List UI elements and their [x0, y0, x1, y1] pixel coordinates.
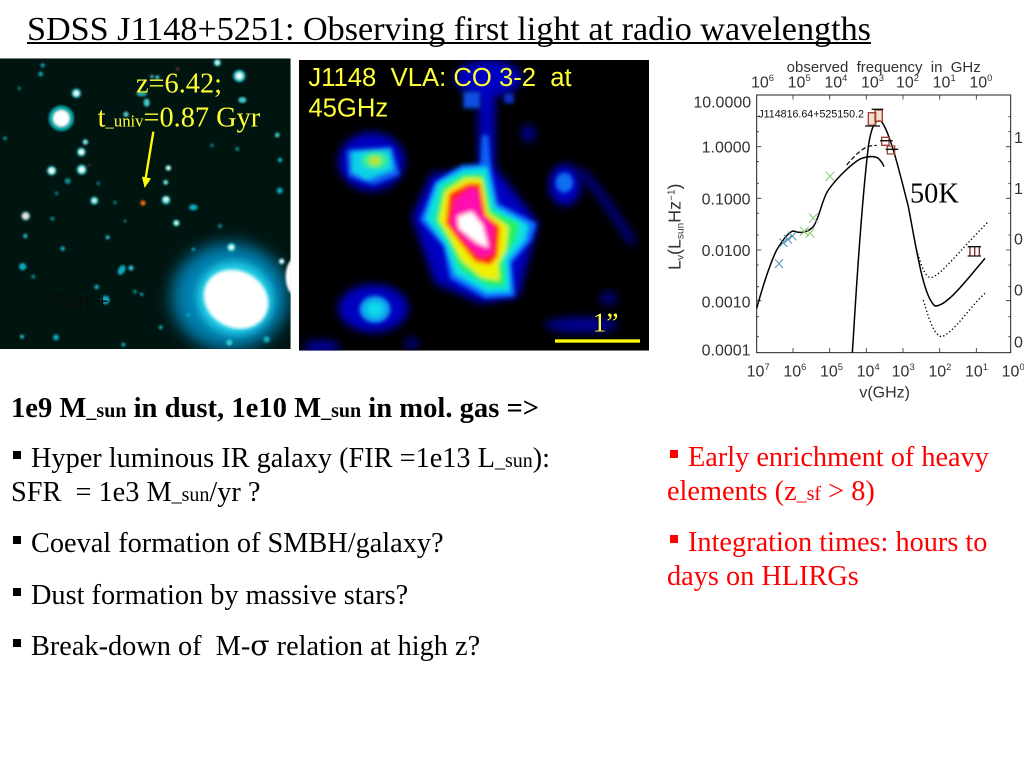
label: redshift: t_univ=0.87 Gyr	[98, 102, 261, 133]
x-axis labels: 10	[1002, 364, 1019, 381]
y-axis labels: 10.0000	[693, 94, 751, 111]
right-axis labels: 0	[1014, 232, 1023, 249]
red bullet: early enrichment: Early enrichment of heavy	[688, 442, 990, 473]
x-axis labels: 10	[820, 364, 838, 381]
top axis label: observed frequency in GHz	[787, 59, 981, 76]
bullet: break-down: Break-down of M-σ relation at high z?	[31, 629, 480, 662]
y-axis labels: 0.1000	[702, 192, 751, 209]
x-axis labels: 10	[857, 364, 874, 381]
red bullet: integration times: Integration times: hours to	[688, 527, 987, 558]
source name: J114816.64+525150.2	[758, 108, 864, 120]
x-axis labels: 3	[909, 362, 915, 372]
top axis ticks: 10	[824, 75, 842, 92]
scale bar	[555, 308, 640, 343]
top axis ticks	[751, 73, 992, 92]
y-axis labels: 1.0000	[702, 140, 751, 157]
red bullet: integration times	[667, 527, 987, 592]
x-axis labels: 2	[946, 362, 951, 372]
red bullet: early enrichment: elements (z_sf > 8)	[667, 476, 875, 507]
bright stars	[3, 59, 284, 347]
x-axis labels: 10	[747, 364, 764, 381]
right-axis labels: 0	[1014, 334, 1023, 351]
bullet: coeval formation: Coeval formation of SMBH/galaxy?	[31, 528, 444, 559]
y-axis title: sun	[675, 223, 686, 239]
radio emission	[303, 60, 633, 353]
x-axis labels: 6	[801, 362, 806, 372]
panel: VLA CO map: 45GHz	[308, 94, 388, 122]
label: redshift	[98, 68, 261, 133]
y-axis labels	[693, 94, 751, 359]
bullet: hyper luminous: Hyper luminous IR galaxy (FIR =1e13 L_sun):	[31, 443, 550, 474]
data points: green crosses	[800, 172, 834, 238]
y-axis title: )	[665, 183, 685, 189]
y-axis title: −1	[667, 189, 678, 201]
bullet: hyper luminous	[11, 443, 550, 508]
top axis ticks: 1	[950, 73, 956, 83]
red bullet: integration times: days on HLIRGs	[667, 561, 859, 592]
top axis ticks: 10	[969, 75, 987, 92]
x-axis labels: 10	[965, 364, 983, 381]
data points: blue crosses	[775, 232, 796, 268]
x-axis labels: 7	[764, 362, 770, 372]
right-axis labels: 0	[1014, 283, 1023, 300]
label: redshift: z=6.42;	[136, 68, 222, 99]
x-axis labels: 1	[983, 362, 988, 372]
panel: VLA CO map	[299, 60, 649, 353]
top axis ticks: 4	[842, 73, 847, 83]
plot frame	[757, 95, 1011, 353]
top axis ticks: 3	[879, 73, 884, 83]
arrow to quasar	[142, 132, 153, 188]
panel: optical starfield image	[0, 58, 304, 350]
top axis ticks: 10	[896, 75, 914, 92]
bullet: dust formation: Dust formation by massive stars?	[31, 580, 408, 611]
top axis ticks: 10	[788, 75, 805, 92]
y-axis title: L	[665, 260, 685, 270]
top axis ticks: 10	[861, 75, 879, 92]
x-axis labels: 10	[928, 364, 946, 381]
label: 50K: 50K	[910, 178, 959, 209]
right-axis labels: 1	[1014, 130, 1023, 147]
panel: SED chart	[665, 59, 1024, 401]
top axis ticks: 5	[805, 73, 811, 83]
top axis ticks: 6	[769, 73, 774, 83]
title: SDSS J1148+5251: Observing first light at radio wavelengths	[27, 11, 871, 48]
red bullet: early enrichment	[667, 442, 990, 507]
y-axis title: v	[675, 255, 686, 260]
right-axis labels	[1014, 130, 1023, 351]
y-axis title: Hz	[665, 201, 685, 223]
y-axis labels: 0.0010	[702, 294, 751, 311]
map heading: J1148 VLA: CO 3-2 at	[308, 64, 572, 92]
top axis ticks: 0	[987, 73, 992, 83]
x-axis title: v(GHz)	[859, 384, 910, 401]
x-axis labels: 4	[874, 362, 880, 372]
x-axis labels	[747, 362, 1024, 381]
top axis ticks: 10	[933, 75, 950, 92]
data points: red error bars	[865, 109, 981, 256]
y-axis labels: 0.0100	[702, 243, 751, 260]
right-axis labels: 1	[1014, 181, 1023, 198]
credit: Fan: Fan +	[53, 290, 108, 314]
quasar dot	[140, 200, 146, 206]
tick marks	[757, 95, 1011, 353]
top axis ticks: 10	[751, 75, 769, 92]
x-axis labels: 5	[838, 362, 843, 372]
y-axis labels: 0.0001	[702, 342, 751, 359]
bullet: hyper luminous: SFR = 1e3 M_sun/yr ?	[11, 477, 260, 508]
x-axis labels: 10	[783, 364, 801, 381]
y-axis title: (L	[665, 239, 685, 255]
top axis ticks: 2	[914, 73, 919, 83]
text block: dust and gas headline: 1e9 M_sun in dust, 1e10 M_sun in mol. gas =>	[11, 393, 539, 424]
SED curves	[757, 121, 988, 353]
galaxy glow	[172, 243, 304, 350]
x-axis labels: 10	[892, 364, 909, 381]
scale bar: 1”	[593, 308, 618, 338]
